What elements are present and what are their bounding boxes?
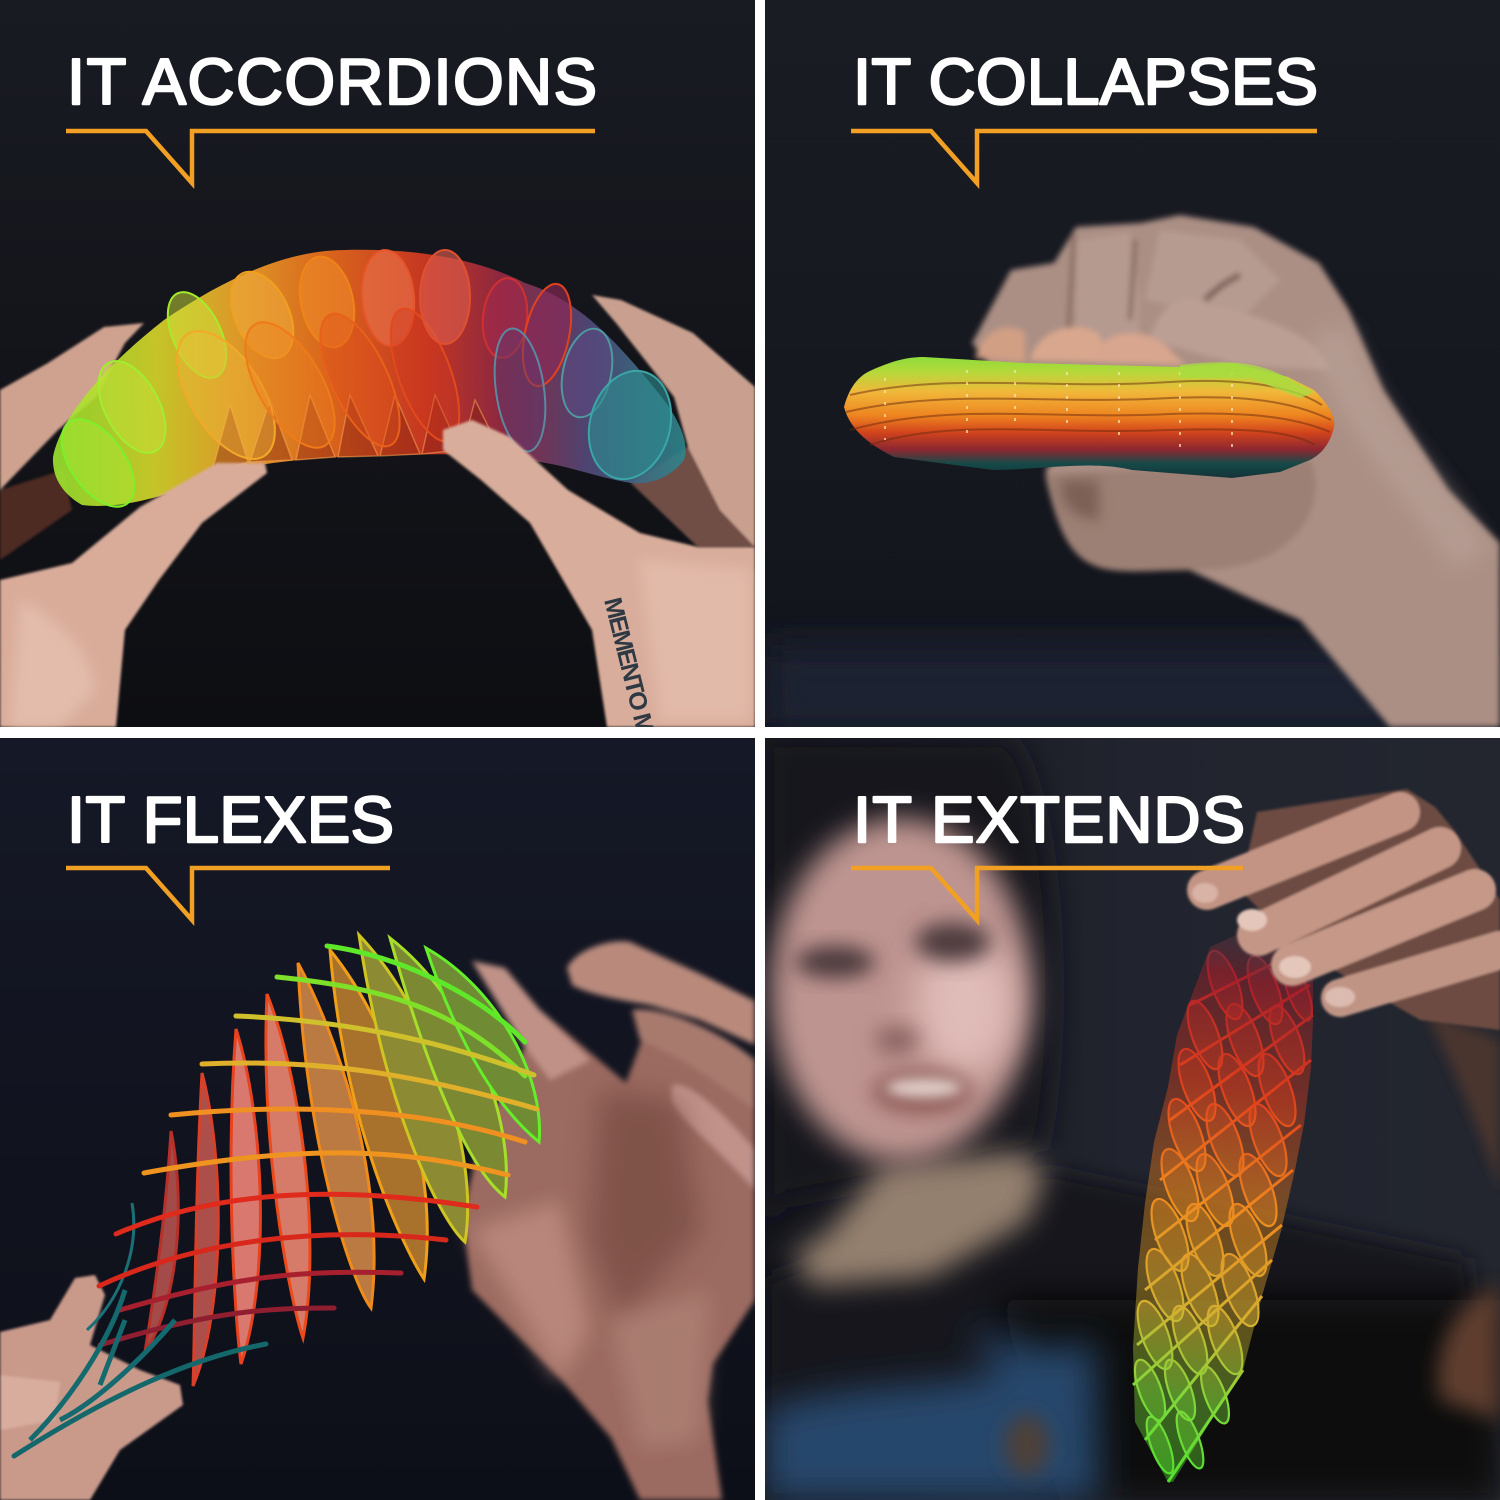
callout line: [851, 131, 1317, 183]
photo: fingers holding the toy top: [1192, 789, 1500, 1030]
panel: it collapses: [765, 0, 1500, 735]
lower lattice of the toy: [212, 395, 500, 472]
callout line: [66, 868, 390, 920]
product: rainbow toy collapsed: [844, 357, 1334, 478]
photo: blurred person in the background: [765, 738, 1500, 1500]
photo: dark shirt blur: [765, 642, 1390, 727]
callout line: [66, 131, 595, 183]
ribs of the toy: [1133, 950, 1313, 1482]
heading: IT FLEXES: IT FLEXES: [67, 783, 394, 856]
product: rainbow toy extended: [1129, 900, 1318, 1482]
callout line: [851, 868, 1243, 920]
photo: right hand, blurred: [462, 941, 755, 1500]
photo: hand squeezing the toy: [972, 215, 1500, 727]
photo: hands behind the toy: [0, 295, 755, 560]
discs of the toy: [1129, 947, 1318, 1476]
photo: left hand, lower corner: [0, 1275, 183, 1500]
photo: fingers in front of the toy: [0, 420, 755, 727]
horizontal layers of the toy: [846, 381, 1331, 445]
translucent lobes of the toy: [47, 248, 683, 519]
panel: it extends: [765, 738, 1500, 1500]
panel: it flexes: [0, 738, 755, 1500]
panel: it accordions: [0, 0, 755, 737]
product: rainbow toy arched: [47, 248, 686, 519]
product: teal end of the toy: [30, 1290, 175, 1440]
heading: IT EXTENDS: IT EXTENDS: [853, 783, 1245, 856]
glinting edge marks of the toy: [885, 370, 1232, 455]
product: ribs of the toy: [14, 946, 537, 1456]
heading: IT ACCORDIONS: IT ACCORDIONS: [67, 45, 597, 118]
product: translucent discs of the toy: [87, 935, 540, 1386]
heading: IT COLLAPSES: IT COLLAPSES: [853, 45, 1318, 118]
wrist tattoo: MEMENTO M: [598, 595, 659, 737]
